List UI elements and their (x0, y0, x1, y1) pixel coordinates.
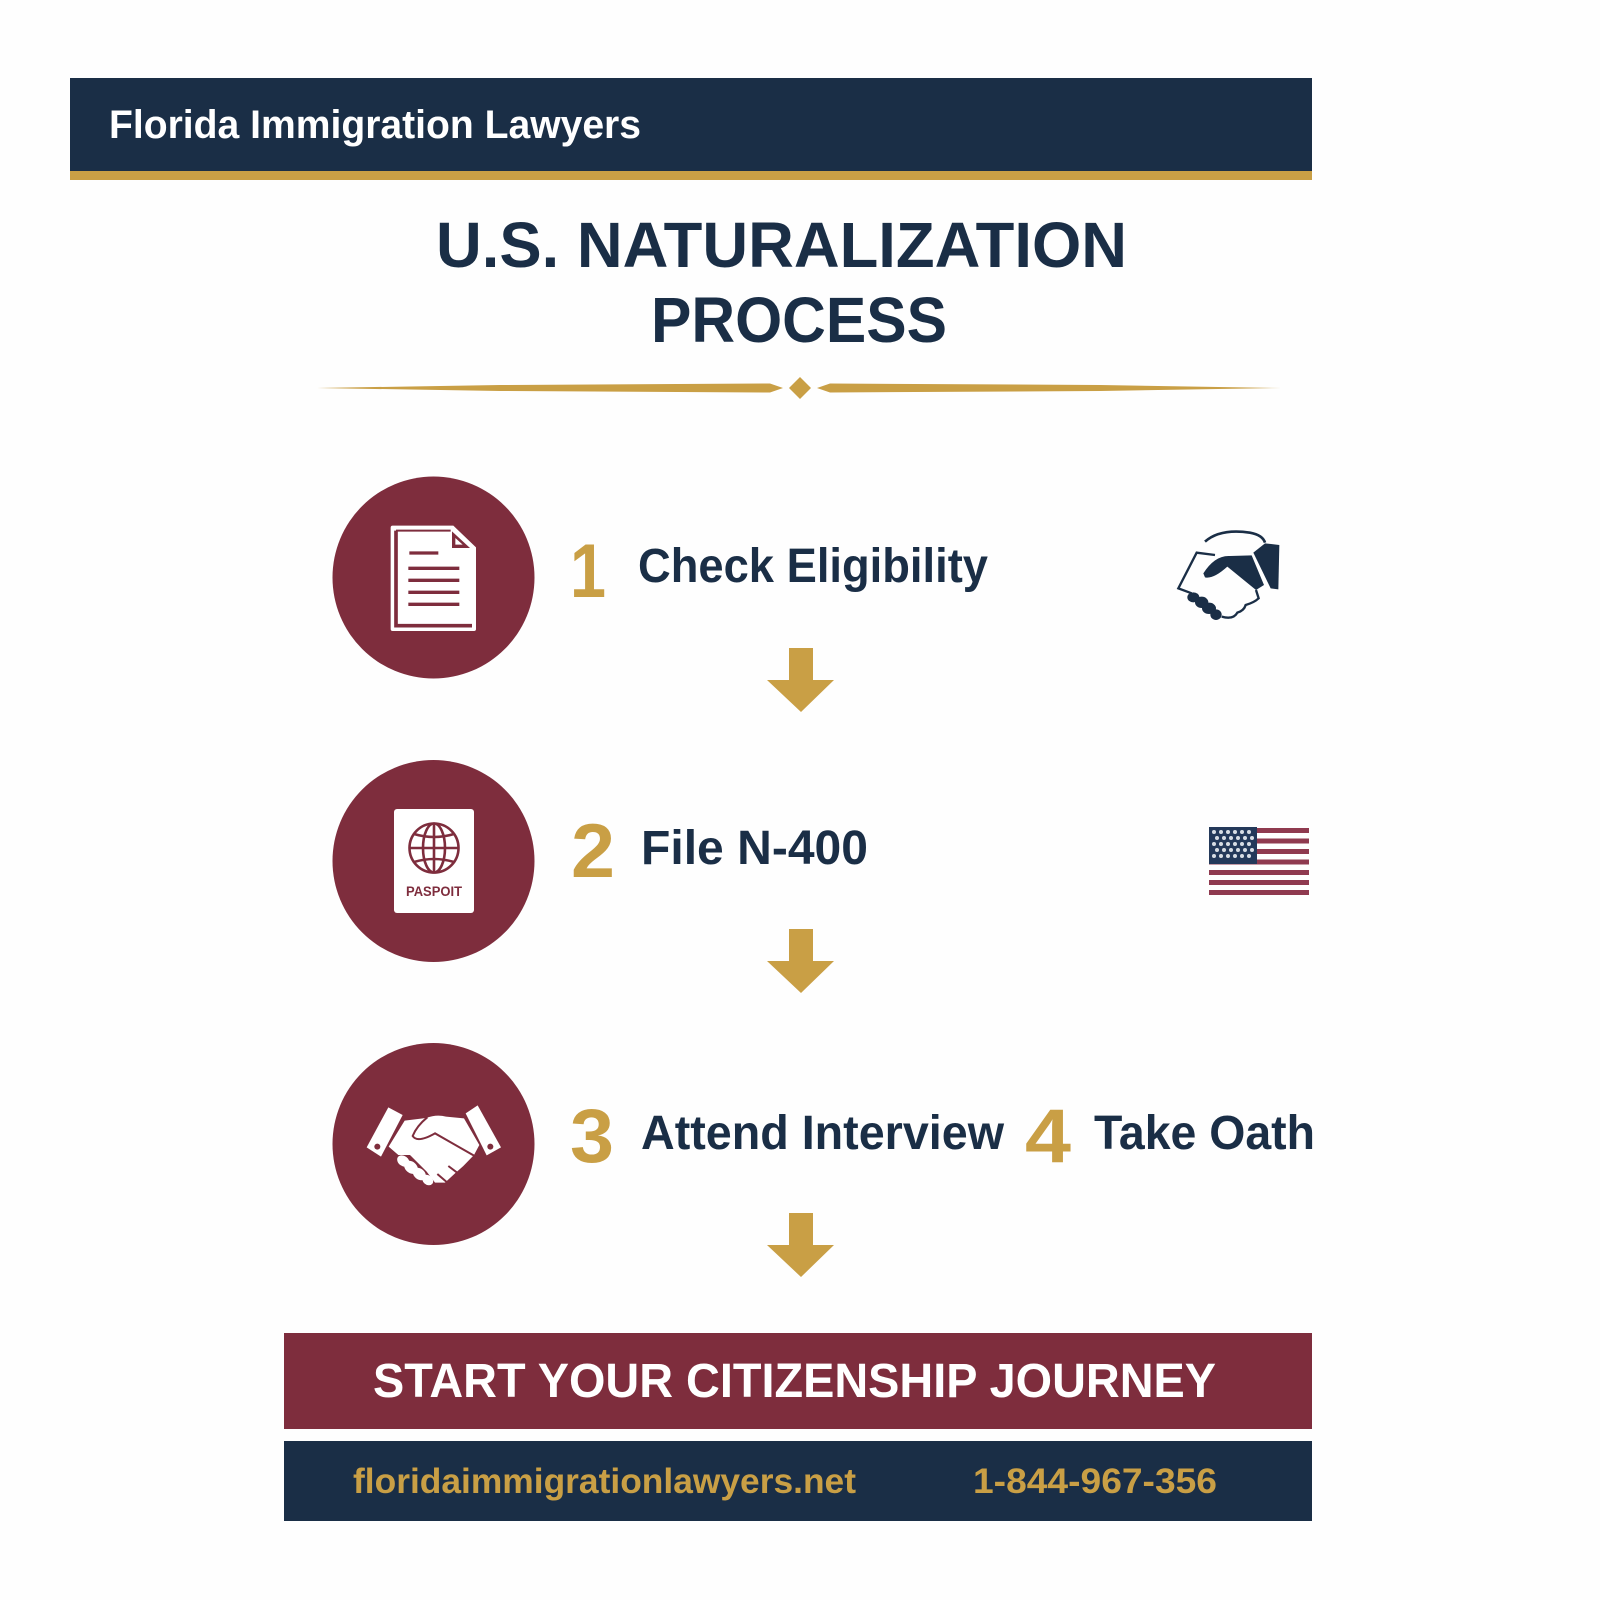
step number 3: 3 (570, 1094, 614, 1179)
header banner (70, 78, 1312, 180)
call to action banner: START YOUR CITIZENSHIP JOURNEY (373, 1355, 1216, 1408)
title divider ornament (317, 377, 1281, 399)
title (436, 209, 1127, 356)
icon: handshake in circle (332, 1043, 534, 1245)
phone: 1-844-967-356 (973, 1462, 1217, 1501)
brand name: Florida Immigration Lawyers (109, 103, 641, 147)
step label: file n-400: File N-400 (641, 822, 868, 875)
step 2 (332, 760, 1309, 962)
icon: navy handshake (1178, 532, 1279, 620)
contact bar (284, 1441, 1312, 1521)
step 3 (332, 1043, 1005, 1245)
icon: american flag (1209, 827, 1309, 895)
step 4 (1025, 1094, 1315, 1179)
step 1 (332, 476, 1279, 678)
step label: check eligibility: Check Eligibility (638, 540, 988, 593)
icon: passport in circle: PASPOIT (406, 884, 463, 899)
step label: attend interview: Attend Interview (641, 1107, 1005, 1160)
step number 2: 2 (571, 809, 615, 894)
arrow 1 (767, 648, 834, 712)
step number 4: 4 (1025, 1094, 1071, 1179)
call to action banner (284, 1333, 1312, 1429)
step number 1: 1 (570, 529, 606, 614)
arrow 3 (767, 1213, 834, 1277)
arrow 2 (767, 929, 834, 993)
title: PROCESS (651, 284, 947, 356)
icon: document in circle (332, 476, 534, 678)
website: floridaimmigrationlawyers.net (353, 1462, 856, 1501)
icon: passport in circle (332, 760, 534, 962)
step label: take oath: Take Oath (1094, 1107, 1315, 1160)
title: U.S. NATURALIZATION (436, 209, 1127, 281)
